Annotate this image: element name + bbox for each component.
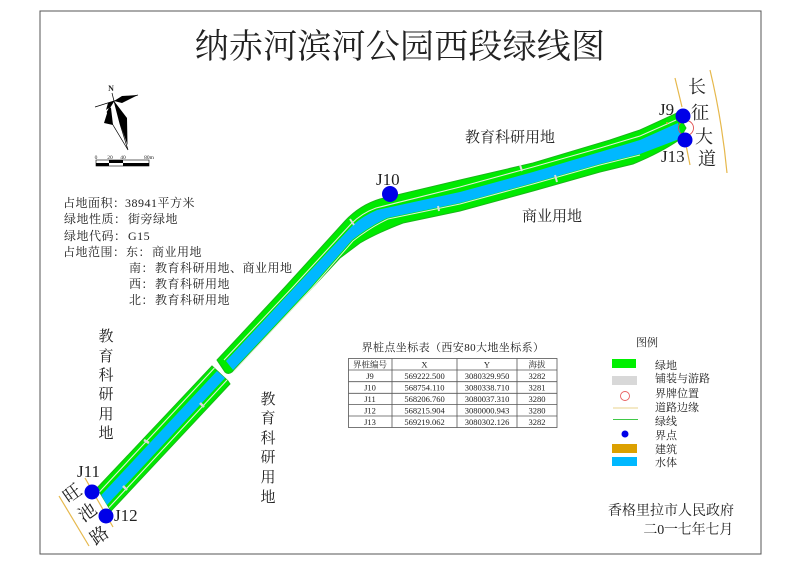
- road edge: Changzheng Avenue: [675, 70, 727, 173]
- land use label: south vertical: 科: [260, 430, 276, 447]
- coordinate table: J11: [364, 394, 376, 404]
- text block: site information: 南：: [129, 260, 154, 275]
- coordinate table: 3080302.126: [465, 417, 509, 427]
- issuer and date: [608, 502, 734, 538]
- road label: Changzheng Avenue: 道: [698, 149, 716, 169]
- icon: north arrow: N: [108, 84, 114, 93]
- legend: 道路边缘: [655, 400, 699, 414]
- coordinate table: 3280: [528, 394, 546, 404]
- text block: site information: 西：: [129, 277, 154, 291]
- coordinate table: J13: [364, 417, 376, 427]
- text block: site information: 教育科研用地: [155, 276, 230, 291]
- coordinate table: 界桩编号: [353, 360, 387, 370]
- coordinate table: [348, 358, 557, 428]
- road label: Wangchi Road: [59, 480, 112, 549]
- scale bar: 20: [107, 155, 113, 161]
- scale bar: 80m: [144, 155, 155, 161]
- land use label: west vertical: 育: [98, 347, 114, 365]
- land use label: west vertical: 用: [98, 406, 114, 423]
- issuer and date: 香格里拉市人民政府: [608, 502, 734, 519]
- scale bar: 40: [120, 155, 126, 161]
- land use label: south vertical: 研: [260, 449, 276, 466]
- coordinate table: 海拔: [528, 360, 546, 370]
- coordinate table: J9: [366, 371, 374, 381]
- text block: site information: 绿地代码：: [64, 228, 127, 243]
- boundary point labels: [77, 100, 685, 525]
- coordinate table: 3282: [528, 371, 546, 381]
- river park: upper section: [217, 113, 686, 374]
- road label: Changzheng Avenue: [688, 77, 716, 169]
- legend: 绿地: [655, 358, 677, 372]
- road edge: Wangchi Road: [59, 478, 113, 546]
- legend: 铺装与游路: [655, 371, 710, 385]
- legend: 绿线: [655, 414, 677, 428]
- text block: site information: 东：: [126, 245, 151, 259]
- legend: [612, 335, 710, 469]
- coordinate table: 569222.500: [404, 371, 445, 381]
- road label: Changzheng Avenue: 征: [691, 103, 709, 123]
- legend: 图例: [636, 335, 658, 349]
- text block: site information: 占地面积：: [63, 195, 126, 210]
- boundary point labels: J13: [661, 147, 685, 166]
- land use label: commercial: 商业用地: [522, 207, 582, 225]
- land use label: south vertical: 教: [260, 391, 276, 408]
- land use label: west vertical: 地: [98, 424, 114, 442]
- coordinate table: 3080329.950: [465, 371, 509, 381]
- road label: Changzheng Avenue: 长: [688, 77, 706, 97]
- text block: site information: [63, 195, 293, 307]
- boundary point labels: J12: [114, 506, 138, 525]
- road label: Changzheng Avenue: 大: [695, 127, 713, 147]
- text block: site information: 街旁绿地: [128, 211, 178, 226]
- text block: site information: 占地范围：: [63, 244, 126, 259]
- legend: 建筑: [655, 442, 677, 456]
- land use label: south vertical: [260, 391, 276, 506]
- coordinate table: 568206.760: [404, 394, 445, 404]
- boundary points: [84, 108, 692, 524]
- coordinate table: 3281: [528, 382, 546, 392]
- land use label: west vertical: [98, 328, 114, 442]
- coordinate table: 3080037.310: [465, 394, 509, 404]
- coordinate table: 3080000.943: [465, 406, 509, 416]
- legend: 界牌位置: [655, 386, 699, 400]
- boundary point labels: J10: [376, 170, 400, 189]
- land use label: south vertical: 育: [260, 409, 276, 427]
- coordinate table: 3282: [528, 417, 546, 427]
- road label: Wangchi Road: 旺: [59, 480, 85, 507]
- title: 纳赤河滨河公园西段绿线图: [195, 28, 605, 66]
- scale bar: [95, 155, 155, 166]
- land use label: south vertical: 地: [260, 488, 276, 506]
- legend: 界点: [655, 428, 678, 442]
- land use label: north of river: 教育科研用地: [465, 128, 555, 146]
- land use label: west vertical: 科: [98, 367, 114, 384]
- coordinate table: 3280: [528, 406, 546, 416]
- table heading: 界桩点坐标表（西安80大地坐标系）: [362, 340, 544, 354]
- land use label: south vertical: 用: [260, 469, 276, 486]
- text block: site information: 绿地性质：: [64, 211, 127, 226]
- road label: Wangchi Road: 路: [86, 522, 112, 549]
- coordinate table: 568215.904: [404, 406, 445, 416]
- text block: site information: 38941平方米: [125, 195, 195, 210]
- icon: north arrow: [95, 84, 138, 150]
- text block: site information: 教育科研用地: [155, 292, 230, 307]
- text block: site information: 北：: [129, 293, 154, 307]
- boundary point labels: J9: [659, 100, 674, 119]
- coordinate table: Y: [484, 360, 490, 370]
- boundary point labels: J11: [77, 462, 100, 481]
- land use label: west vertical: 研: [98, 386, 114, 403]
- road label: Wangchi Road: 池: [74, 499, 100, 526]
- coordinate table: J12: [364, 406, 376, 416]
- text block: site information: G15: [128, 229, 150, 243]
- text block: site information: 商业用地: [152, 244, 202, 259]
- coordinate table: X: [421, 360, 428, 370]
- scale bar: 0: [95, 155, 98, 161]
- river park: lower section: [97, 366, 230, 511]
- coordinate table: 568754.110: [404, 382, 445, 392]
- issuer and date: 二0一七年七月: [643, 521, 733, 538]
- coordinate table: 3080338.710: [465, 382, 509, 392]
- coordinate table: J10: [364, 382, 376, 392]
- legend: 水体: [655, 455, 677, 469]
- coordinate table: 569219.062: [404, 417, 445, 427]
- text block: site information: 教育科研用地、商业用地: [155, 260, 293, 275]
- boundary sign marker: [678, 120, 694, 136]
- land use label: west vertical: 教: [98, 328, 114, 345]
